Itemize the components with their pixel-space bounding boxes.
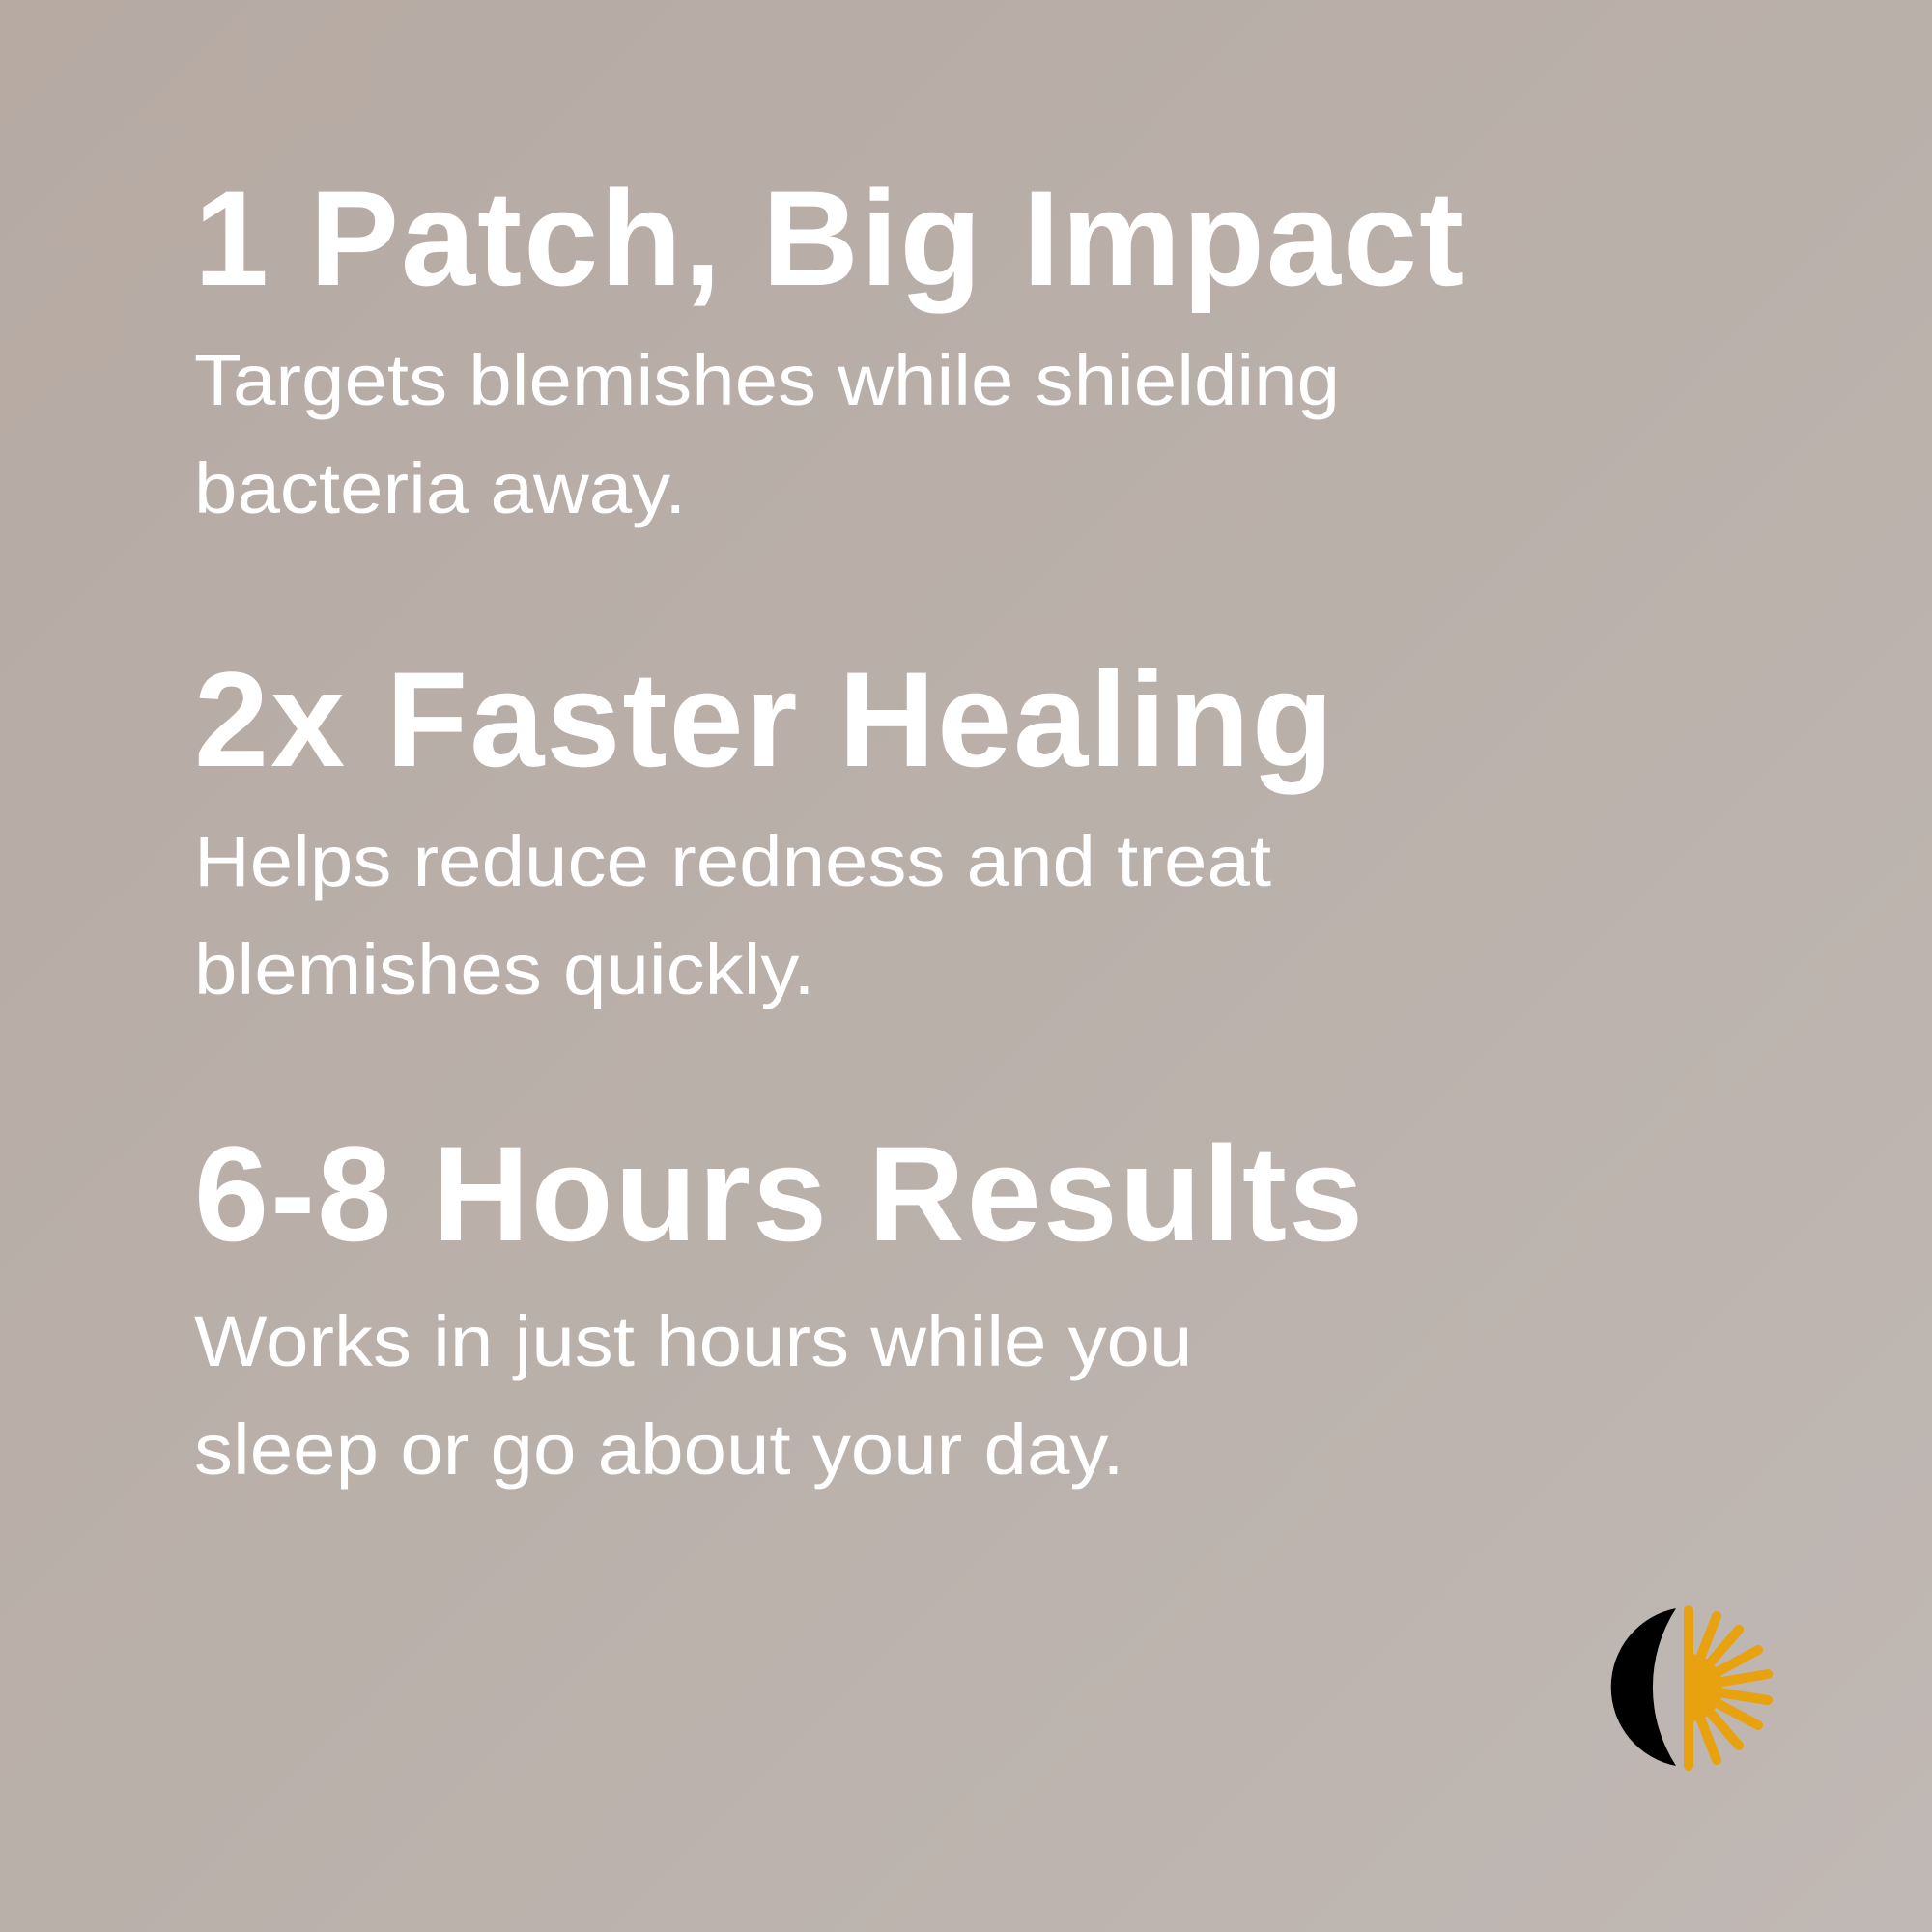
text block: results description: Works in just hours while you	[194, 1301, 1192, 1381]
icon: moon and sun logo	[1611, 1605, 1773, 1771]
heading: 1 Patch, Big Impact: 1 Patch, Big Impact	[194, 162, 1465, 314]
text block: results description: sleep or go about your day.	[194, 1409, 1124, 1490]
text block: patch description: Targets blemishes while shielding	[194, 340, 1340, 420]
text block: healing description: blemishes quickly.	[194, 929, 815, 1009]
text block: patch description: bacteria away.	[194, 448, 686, 528]
icon: half sun	[1689, 1610, 1768, 1766]
text block: healing description	[194, 821, 1271, 1009]
text block: results description	[194, 1301, 1192, 1490]
icon: crescent moon	[1611, 1608, 1676, 1766]
heading: 6-8 Hours Results: 6-8 Hours Results	[194, 1118, 1365, 1269]
heading: 2x Faster Healing: 2x Faster Healing	[194, 643, 1335, 795]
text block: healing description: Helps reduce redness and treat	[194, 821, 1271, 901]
text block: patch description	[194, 340, 1340, 528]
